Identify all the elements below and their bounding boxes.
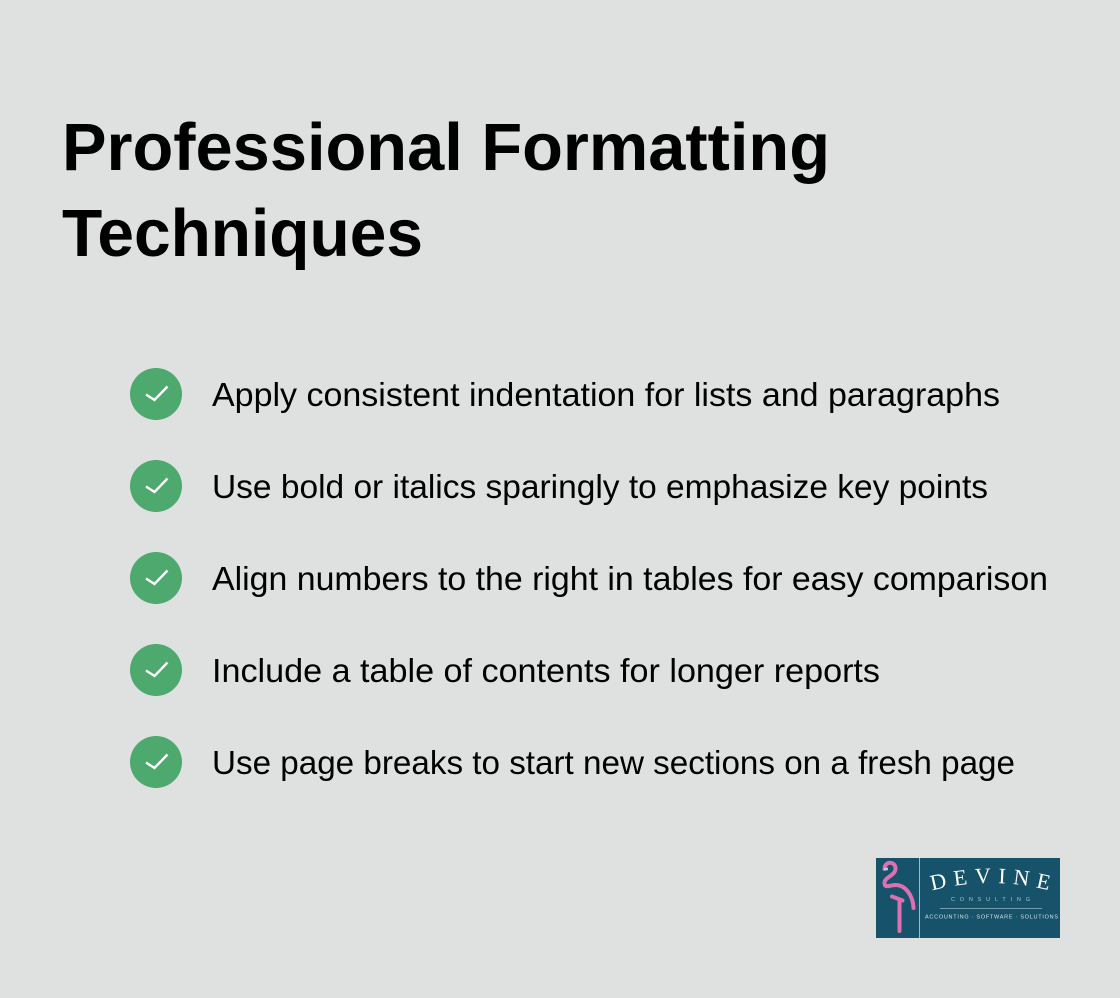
logo: Devine Consulting bbox=[876, 858, 1060, 938]
list item 2 bbox=[130, 460, 988, 512]
list item 5: Use page breaks to start new sections on a fresh page bbox=[212, 744, 1015, 781]
title bbox=[62, 110, 830, 271]
list item 3 bbox=[130, 552, 1048, 604]
list item 4: Include a table of contents for longer reports bbox=[212, 652, 880, 689]
subtitle: CONSULTING bbox=[951, 897, 1030, 903]
title: Techniques bbox=[62, 196, 423, 271]
list item 2: Use bold or italics sparingly to emphasize key points bbox=[212, 468, 988, 505]
wordmark: DEVINE bbox=[930, 868, 1050, 890]
list item 4 bbox=[130, 644, 880, 696]
list item 5 bbox=[130, 736, 1015, 788]
tagline: ACCOUNTING · SOFTWARE · SOLUTIONS bbox=[925, 914, 1058, 920]
list item 3: Align numbers to the right in tables for easy comparison bbox=[212, 560, 1048, 597]
checklist bbox=[130, 368, 1048, 788]
title: Professional Formatting bbox=[62, 110, 830, 185]
list item 1: Apply consistent indentation for lists and paragraphs bbox=[212, 376, 1000, 413]
list item 1 bbox=[130, 368, 1000, 420]
icon: flamingo bbox=[884, 863, 914, 931]
